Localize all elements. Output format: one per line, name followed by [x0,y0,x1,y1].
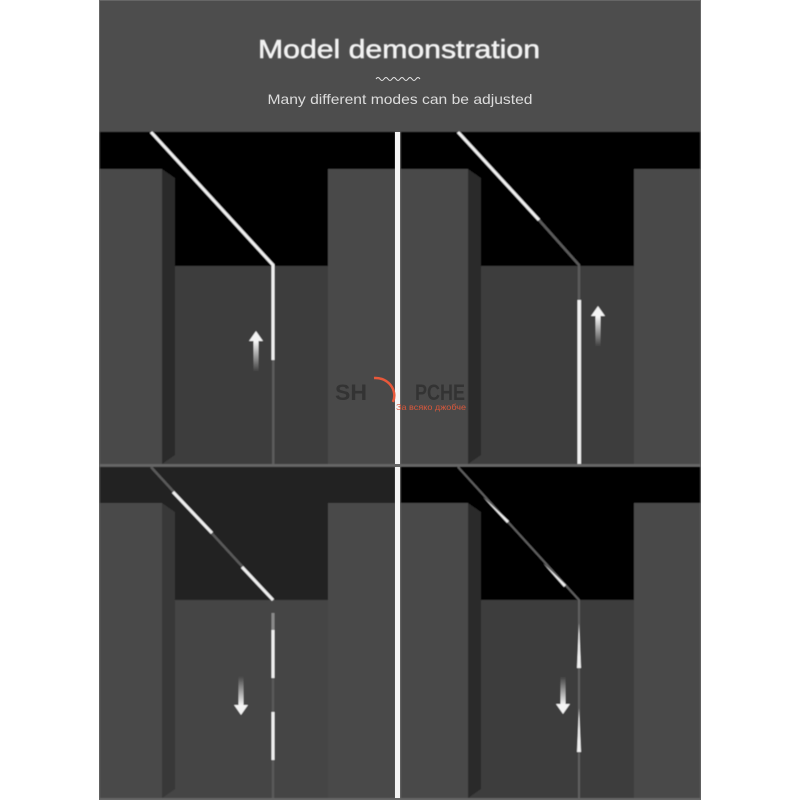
header band [100,1,700,132]
light strip: lit diagonal [458,132,539,220]
watermark tagline: За всяко джобче [396,402,466,412]
panel: bottom-left mode, dashed downward [100,467,395,798]
light strip: dim segment [272,613,274,630]
watermark [335,378,466,412]
title: Model demonstration [258,34,540,64]
light strip: unlit section [272,360,274,464]
arrow: up [591,306,605,347]
wavy divider [376,78,420,80]
center divider [395,132,400,464]
watermark: SH [335,380,367,405]
light strip: unlit base [151,467,273,798]
light strip: tapered pulses [483,497,581,752]
subtitle: Many different modes can be adjusted [268,91,532,107]
watermark arc [374,378,394,402]
arrow: down [234,676,248,715]
light strip: lit section [151,132,273,360]
light strip: lit segments [173,492,273,760]
light strip: lit vertical [578,300,581,464]
arrow: down [556,676,570,714]
light strip: unlit base [458,467,579,798]
arrow: up [249,331,263,372]
panel: bottom-right mode, tapered pulses [401,467,700,798]
light strip: unlit section [539,220,579,300]
watermark: PCHE [415,380,465,405]
bottom center divider [395,467,400,798]
panel: top-left mode, continuous upward [100,132,395,464]
light strip: gap [271,601,276,613]
panel: top-right mode, rising from bottom [401,132,700,464]
